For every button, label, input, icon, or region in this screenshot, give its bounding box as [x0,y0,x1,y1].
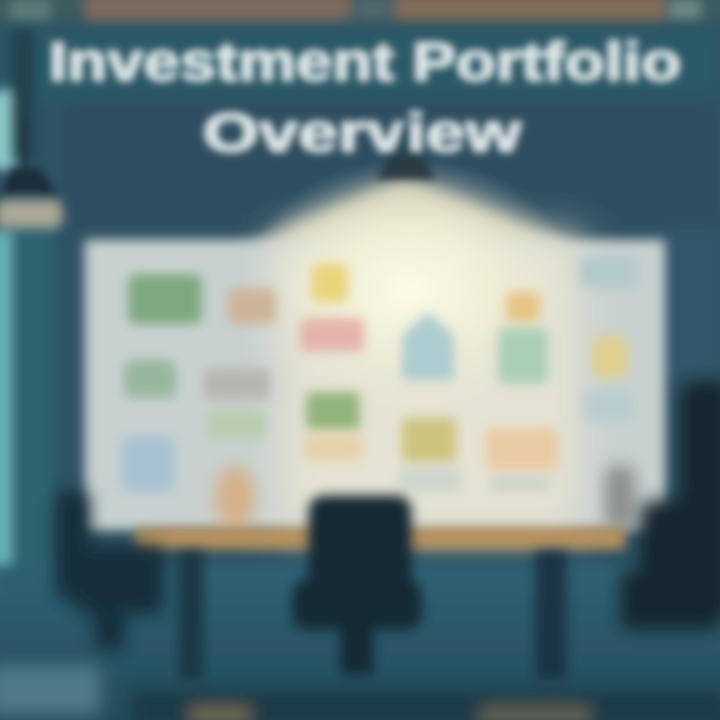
title: Investment Portfolio [49,32,681,92]
light cone [240,178,580,250]
title: Overview [203,103,522,163]
text block: upper right [580,256,638,288]
chair: right [620,380,720,630]
text block: lower middle [490,476,550,492]
person silhouette left [215,465,635,530]
chart: olive block [402,418,456,462]
lamp over board [376,125,436,180]
text block: right [584,390,634,422]
chart: green stacked [206,410,266,440]
floor shadow and highlights [0,665,720,720]
floor [0,565,720,720]
chart: blue lower-left [122,436,174,492]
chart: teal block [498,328,548,384]
ceiling beam [0,0,720,22]
title [49,32,681,163]
chart: pink block [300,318,364,352]
left pendant lamp [0,120,62,228]
chart: green block [128,274,202,324]
chart: small green [124,360,176,398]
chart: green and orange [304,392,362,462]
icon: tan block [228,288,276,324]
chart: orange bars [486,428,558,470]
icon: orange block [506,292,540,322]
table [135,527,625,680]
chair: left [55,490,165,650]
chair: centre [292,495,422,675]
icon: yellow block [312,264,348,302]
chart: grey stacked [204,368,270,400]
panel: whiteboard [85,160,665,530]
icon: yellow right [592,336,628,378]
text block: lower centre [400,468,460,492]
chart: blue block [402,312,454,380]
left window [0,30,54,650]
